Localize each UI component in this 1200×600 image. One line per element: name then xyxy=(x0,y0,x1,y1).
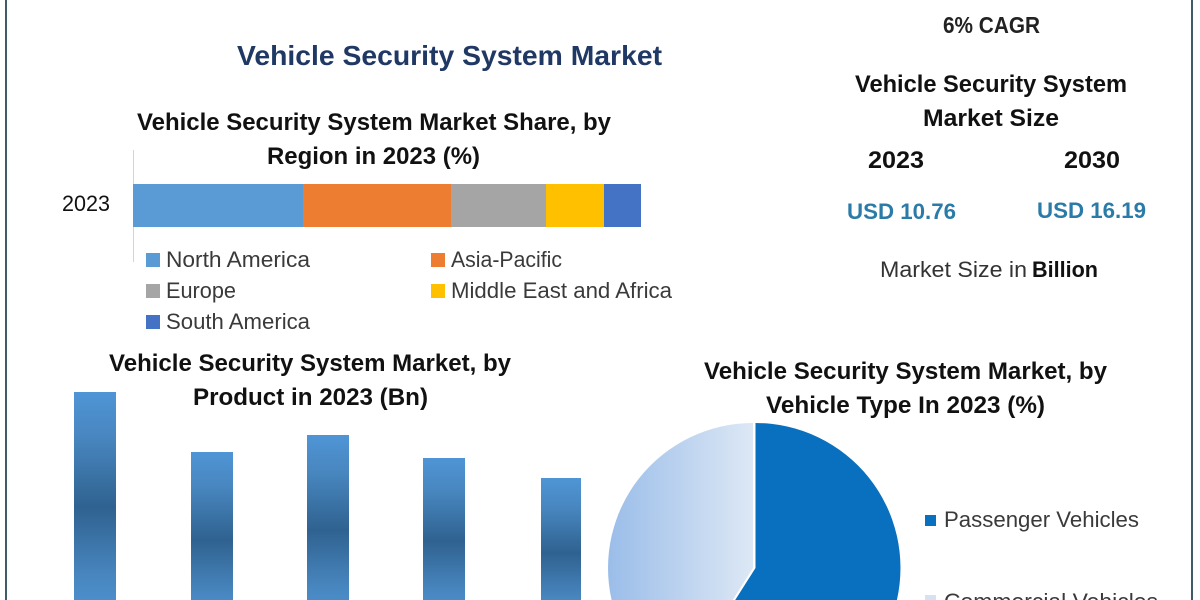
year 2023: 2023 xyxy=(868,147,924,174)
heading: market size xyxy=(855,71,1127,132)
stacked bar chart xyxy=(133,150,641,262)
value 2030: USD 16.19 xyxy=(1037,198,1146,223)
heading: vehicle type: Vehicle Security System Market, by xyxy=(704,358,1108,385)
heading: market size: Market Size xyxy=(923,105,1059,132)
legend: regions: Middle East and Africa xyxy=(451,278,673,303)
heading: market size: Vehicle Security System xyxy=(855,71,1127,98)
heading: product: Vehicle Security System Market, by xyxy=(109,350,512,377)
legend: regions: Europe xyxy=(166,278,236,303)
unit note xyxy=(880,257,1098,282)
pie chart xyxy=(608,423,900,600)
title: Vehicle Security System Market xyxy=(237,40,662,71)
panel: market by product xyxy=(74,350,581,600)
panel: market share by region xyxy=(62,109,673,334)
unit note: Market Size in xyxy=(880,257,1027,282)
panel: market by vehicle type xyxy=(608,358,1158,600)
heading: region share: Vehicle Security System Market Share, by xyxy=(137,109,612,136)
legend: vehicle types xyxy=(925,507,1158,600)
bar chart xyxy=(74,392,581,600)
axis label 2023: 2023 xyxy=(62,191,110,216)
legend: regions xyxy=(146,247,673,334)
frame left edge xyxy=(5,0,7,600)
legend: regions: Asia-Pacific xyxy=(451,247,562,272)
heading: region share: Region in 2023 (%) xyxy=(267,143,480,170)
value 2023: USD 10.76 xyxy=(847,199,956,224)
frame right edge xyxy=(1191,0,1193,600)
panel: market size xyxy=(847,12,1146,282)
CAGR: 6% CAGR xyxy=(943,12,1040,38)
heading: region share xyxy=(137,109,612,170)
legend: regions: North America xyxy=(166,247,311,272)
heading: vehicle type: Vehicle Type In 2023 (%) xyxy=(766,392,1045,419)
heading: product xyxy=(109,350,512,411)
legend: regions: South America xyxy=(166,309,311,334)
heading: product: Product in 2023 (Bn) xyxy=(193,384,428,411)
unit note: Billion xyxy=(1032,257,1098,282)
heading: vehicle type xyxy=(704,358,1108,419)
year 2030: 2030 xyxy=(1064,147,1120,174)
legend: vehicle types: Passenger Vehicles xyxy=(944,507,1139,532)
